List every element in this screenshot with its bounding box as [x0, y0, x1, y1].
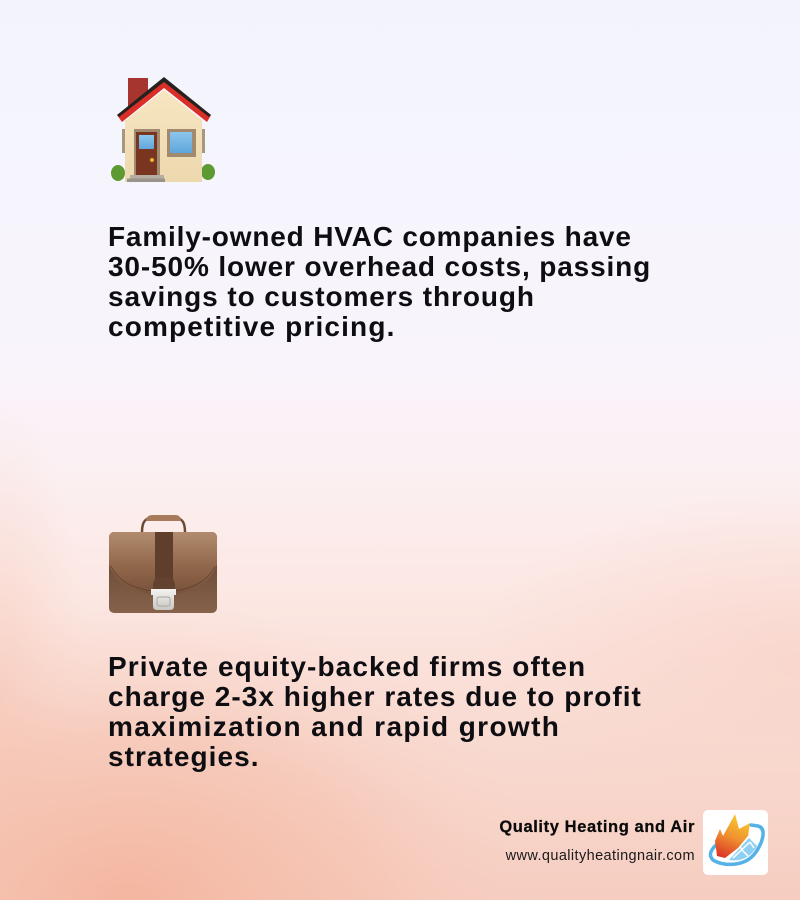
- icon: house: [111, 77, 215, 182]
- text: family-owned fact: Family-owned HVAC companies have: [108, 221, 632, 252]
- text: private equity fact: maximization and rapid growth: [108, 711, 560, 742]
- text: private equity fact: strategies.: [108, 741, 260, 772]
- website: www.qualityheatingnair.com: [506, 848, 695, 864]
- logo: [703, 810, 768, 875]
- icon: briefcase: [109, 515, 217, 613]
- text: private equity fact: [108, 651, 642, 772]
- text: family-owned fact: [108, 221, 651, 342]
- text: private equity fact: Private equity-backed firms often: [108, 651, 586, 682]
- text: private equity fact: charge 2-3x higher rates due to profit: [108, 681, 642, 712]
- text: family-owned fact: 30-50% lower overhead costs, passing: [108, 251, 651, 282]
- text: family-owned fact: savings to customers through: [108, 281, 535, 312]
- brand name: Quality Heating and Air: [499, 818, 695, 836]
- text: family-owned fact: competitive pricing.: [108, 311, 396, 342]
